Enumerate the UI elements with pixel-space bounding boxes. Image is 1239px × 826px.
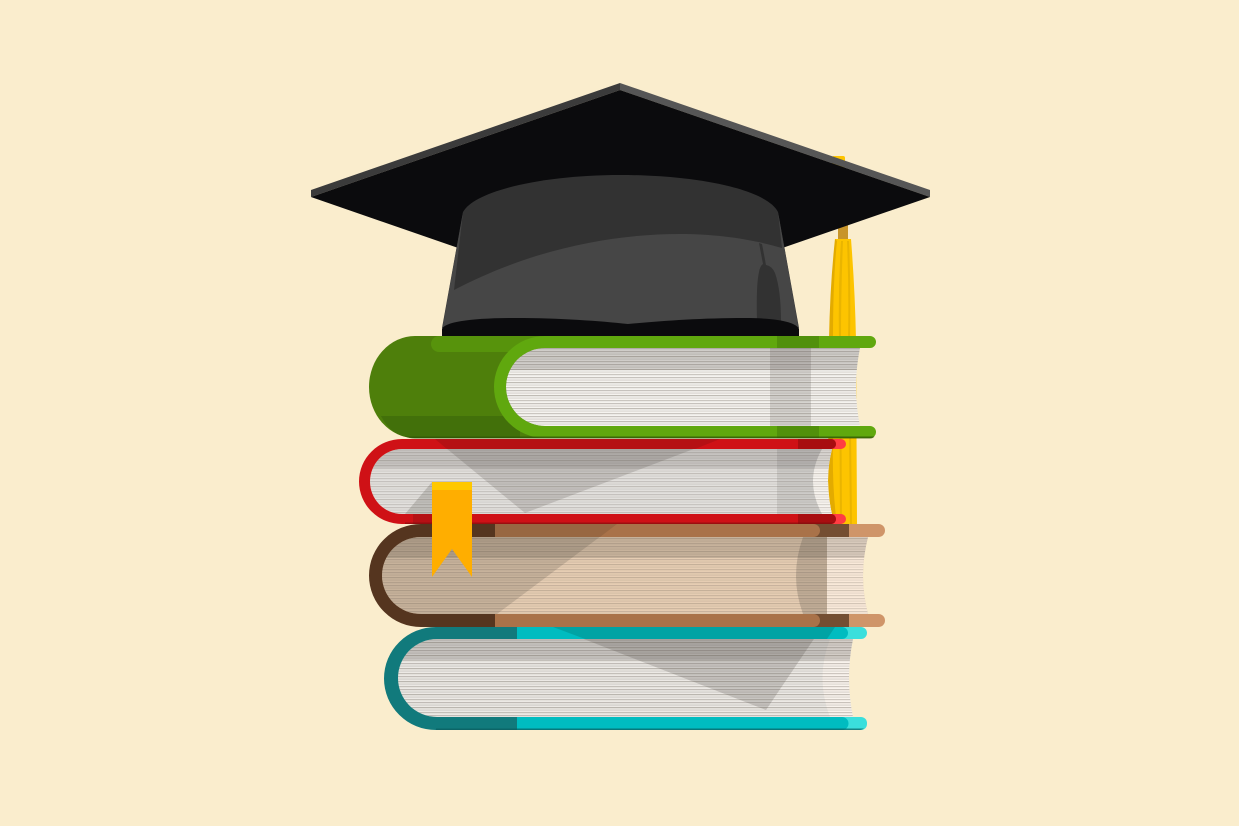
brown book cover bbox=[369, 524, 495, 627]
cap band bbox=[442, 318, 799, 340]
red book tips bbox=[826, 439, 846, 449]
cap body highlight bbox=[442, 212, 799, 330]
red book cover shadows bbox=[435, 439, 720, 449]
brown book cover shadow bbox=[495, 524, 617, 537]
book: teal bbox=[384, 627, 867, 730]
tassel cord reflection bbox=[757, 243, 781, 322]
bookmark bbox=[432, 482, 472, 577]
tassel bbox=[828, 156, 857, 524]
teal book pages bbox=[398, 639, 853, 717]
cap board bevel right bbox=[620, 83, 930, 197]
book: brown bbox=[369, 524, 885, 627]
green book pages bbox=[506, 348, 860, 426]
teal book cover tips bbox=[835, 627, 867, 639]
red book cover bbox=[359, 439, 836, 524]
green book cover bbox=[494, 336, 876, 438]
book: green bbox=[369, 336, 876, 438]
teal book cover bbox=[384, 627, 517, 730]
brown book pages bbox=[382, 537, 868, 614]
teal book top cover shadow bbox=[553, 627, 835, 639]
brown book tips bbox=[835, 524, 885, 537]
green book spine bbox=[369, 336, 570, 438]
green spine lower shade bbox=[381, 416, 520, 438]
red book pages bbox=[370, 449, 832, 514]
cap board bbox=[311, 90, 930, 304]
cap board bevel left bbox=[311, 83, 620, 197]
graduation cap bbox=[311, 83, 930, 340]
book: red bbox=[359, 439, 846, 524]
illustration: graduation cap on stack of books bbox=[311, 83, 930, 730]
cap body bbox=[442, 175, 799, 328]
green spine highlight bbox=[431, 336, 551, 352]
green cover shadows bbox=[777, 336, 819, 348]
